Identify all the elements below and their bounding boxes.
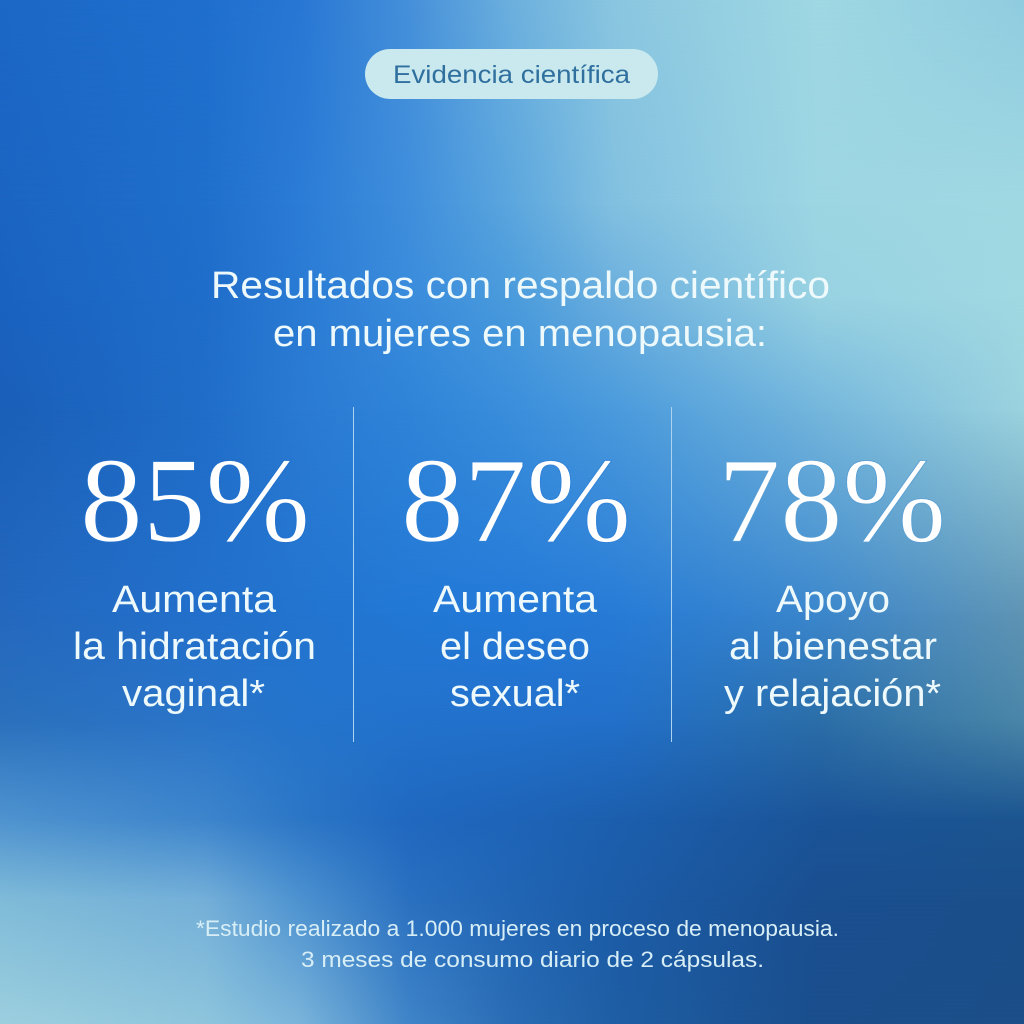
stat column: 87% <box>401 434 631 715</box>
badge: Evidencia científica <box>365 49 658 99</box>
divider <box>671 407 672 742</box>
heading <box>211 265 830 355</box>
stat column: 85% <box>73 434 316 715</box>
stat column: 78%: al bienestar <box>729 626 937 668</box>
heading: Resultados con respaldo científico <box>211 265 830 307</box>
badge: Evidencia científica: Evidencia científica <box>393 61 630 89</box>
stat column: 78%: Apoyo <box>776 579 890 621</box>
stat column: 78%: y relajación* <box>724 673 941 715</box>
stat column: 78%: 78% <box>718 434 946 568</box>
footnote: 3 meses de consumo diario de 2 cápsulas. <box>301 947 764 972</box>
heading: en mujeres en menopausia: <box>273 313 767 355</box>
stat column: 85%: Aumenta <box>112 579 277 621</box>
stat column: 87%: sexual* <box>450 673 580 715</box>
stat column: 78% <box>718 434 946 715</box>
footnote: *Estudio realizado a 1.000 mujeres en proceso de menopausia. <box>196 916 839 941</box>
stat column: 87%: Aumenta <box>433 579 598 621</box>
divider <box>353 407 354 742</box>
stat column: 87%: el deseo <box>440 626 590 668</box>
stat column: 85%: 85% <box>80 434 310 568</box>
footnote <box>196 916 839 972</box>
stat column: 87%: 87% <box>401 434 631 568</box>
stat column: 85%: la hidratación <box>73 626 316 668</box>
stat column: 85%: vaginal* <box>122 673 265 715</box>
